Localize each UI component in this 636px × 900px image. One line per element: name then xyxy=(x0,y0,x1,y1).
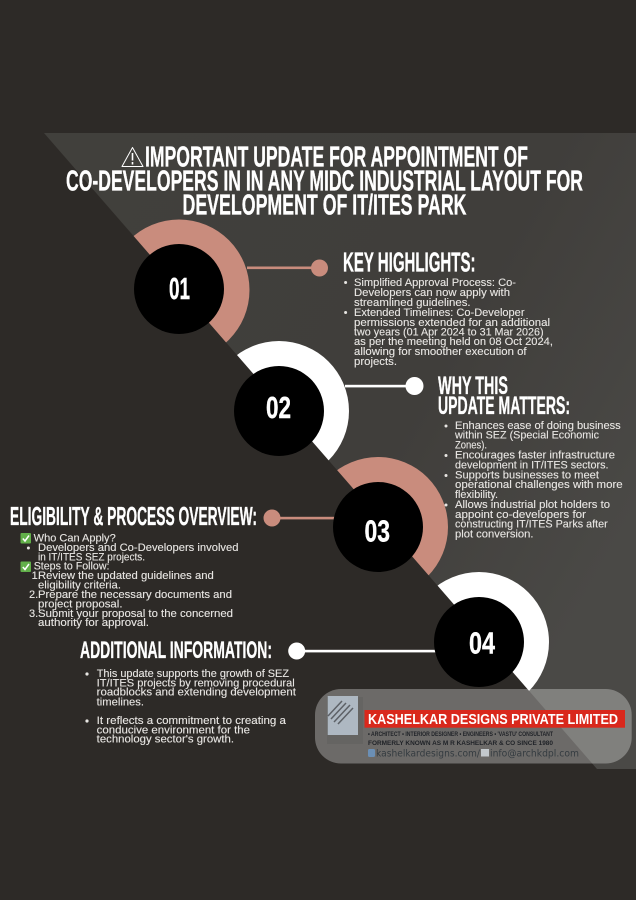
section: eligibility and process overview: 3. xyxy=(29,608,38,620)
company badge: FORMERLY KNOWN AS M R KASHELKAR & CO SINCE 1980 xyxy=(368,741,554,747)
section: eligibility and process overview: authority for approval. xyxy=(38,617,149,629)
icon: green check xyxy=(20,533,31,544)
section: key highlights: two years (01 Apr 2024 to 31 Mar 2026) xyxy=(354,326,544,338)
icon: web xyxy=(368,749,375,757)
company badge: info@archkdpl.com xyxy=(490,748,579,760)
title xyxy=(66,142,583,222)
icon: green check xyxy=(20,562,31,572)
title: DEVELOPMENT OF IT/ITES PARK xyxy=(182,190,467,222)
section: why this update matters: Supports businesses to meet xyxy=(455,469,599,481)
section: additional information: It reflects a commitment to creating a xyxy=(97,715,287,727)
section: why this update matters: Encourages faster infrastructure xyxy=(455,449,615,461)
section: eligibility and process overview: in IT/ITES SEZ projects. xyxy=(38,551,145,563)
section: why this update matters: within SEZ (Special Economic xyxy=(454,430,599,442)
section: additional information: technology sector's growth. xyxy=(97,734,234,746)
section: eligibility and process overview xyxy=(10,501,257,629)
section: eligibility and process overview: Review the updated guidelines and xyxy=(38,570,214,582)
section: why this update matters: constructing IT/ITES Parks after xyxy=(455,519,608,531)
step 02 marker: 02 xyxy=(266,390,291,425)
section: eligibility and process overview: Developers and Co-Developers involved xyxy=(38,542,238,554)
section: why this update matters: flexibility. xyxy=(455,489,498,501)
section: why this update matters: WHY THIS xyxy=(438,372,508,400)
section: eligibility and process overview: Submit your proposal to the concerned xyxy=(38,608,233,620)
section: key highlights: projects. xyxy=(354,356,397,368)
step 03 marker xyxy=(264,457,448,576)
section: additional information: IT/ITES projects by removing procedural xyxy=(97,677,295,689)
step 01 marker: 01 xyxy=(169,271,190,306)
section: additional information xyxy=(80,637,296,746)
section: eligibility and process overview: eligibility criteria. xyxy=(38,580,121,592)
section: why this update matters: plot conversion. xyxy=(455,528,534,540)
section: additional information: timelines. xyxy=(97,696,144,708)
section: why this update matters: appoint co-developers for xyxy=(455,509,586,521)
section: key highlights xyxy=(343,247,553,368)
section: additional information: conducive environment for the xyxy=(97,724,250,736)
section: key highlights: Extended Timelines: Co-Developer xyxy=(354,307,525,319)
section: additional information: roadblocks and extending development xyxy=(97,687,296,699)
section: why this update matters: Allows industrial plot holders to xyxy=(455,499,610,511)
step 04 marker xyxy=(288,572,549,691)
section: key highlights: Simplified Approval Process: Co- xyxy=(354,277,516,289)
section: key highlights: streamlined guidelines. xyxy=(354,297,471,309)
section: key highlights: Developers can now apply with xyxy=(354,287,510,299)
icon: warning triangle xyxy=(122,148,143,166)
step 01 marker xyxy=(134,220,328,342)
section: additional information: ADDITIONAL INFORMATION: xyxy=(80,637,272,664)
section: key highlights: as per the meeting held on 08 Oct 2024, xyxy=(354,336,553,348)
company badge: • ARCHITECT • INTERIOR DESIGNER • ENGINEERS • 'VASTU' CONSULTANT xyxy=(368,732,553,738)
icon: company logo xyxy=(327,696,363,744)
section: why this update matters: operational challenges with more xyxy=(455,479,623,491)
company badge xyxy=(315,689,632,764)
section: eligibility and process overview: 2. xyxy=(29,589,38,601)
section: eligibility and process overview: Who Can Apply? xyxy=(34,532,116,544)
icon: mail xyxy=(481,749,489,756)
section: why this update matters xyxy=(438,372,623,540)
company badge: kashelkardesigns.com/ xyxy=(376,748,481,760)
section: key highlights: permissions extended for an additional xyxy=(354,317,550,329)
diagonal panel xyxy=(44,133,636,769)
section: eligibility and process overview: 1. xyxy=(32,570,41,582)
section: why this update matters: Enhances ease of doing business xyxy=(455,420,621,432)
section: eligibility and process overview: project proposal. xyxy=(38,598,122,610)
section: eligibility and process overview: ELIGIBILITY & PROCESS OVERVIEW: xyxy=(10,501,257,531)
section: key highlights: allowing for smoother execution of xyxy=(354,346,528,358)
section: key highlights: KEY HIGHLIGHTS: xyxy=(343,247,476,278)
step 04 marker: 04 xyxy=(469,626,496,660)
section: eligibility and process overview: Prepare the necessary documents and xyxy=(38,589,232,601)
step 03 marker: 03 xyxy=(364,514,390,548)
banner xyxy=(364,710,625,728)
section: additional information: This update supports the growth of SEZ xyxy=(97,668,289,680)
section: why this update matters: development in IT/ITES sectors. xyxy=(455,459,608,471)
section: why this update matters: Zones). xyxy=(455,439,487,451)
step 02 marker xyxy=(234,341,424,460)
section: eligibility and process overview: Steps to Follow: xyxy=(34,561,110,573)
